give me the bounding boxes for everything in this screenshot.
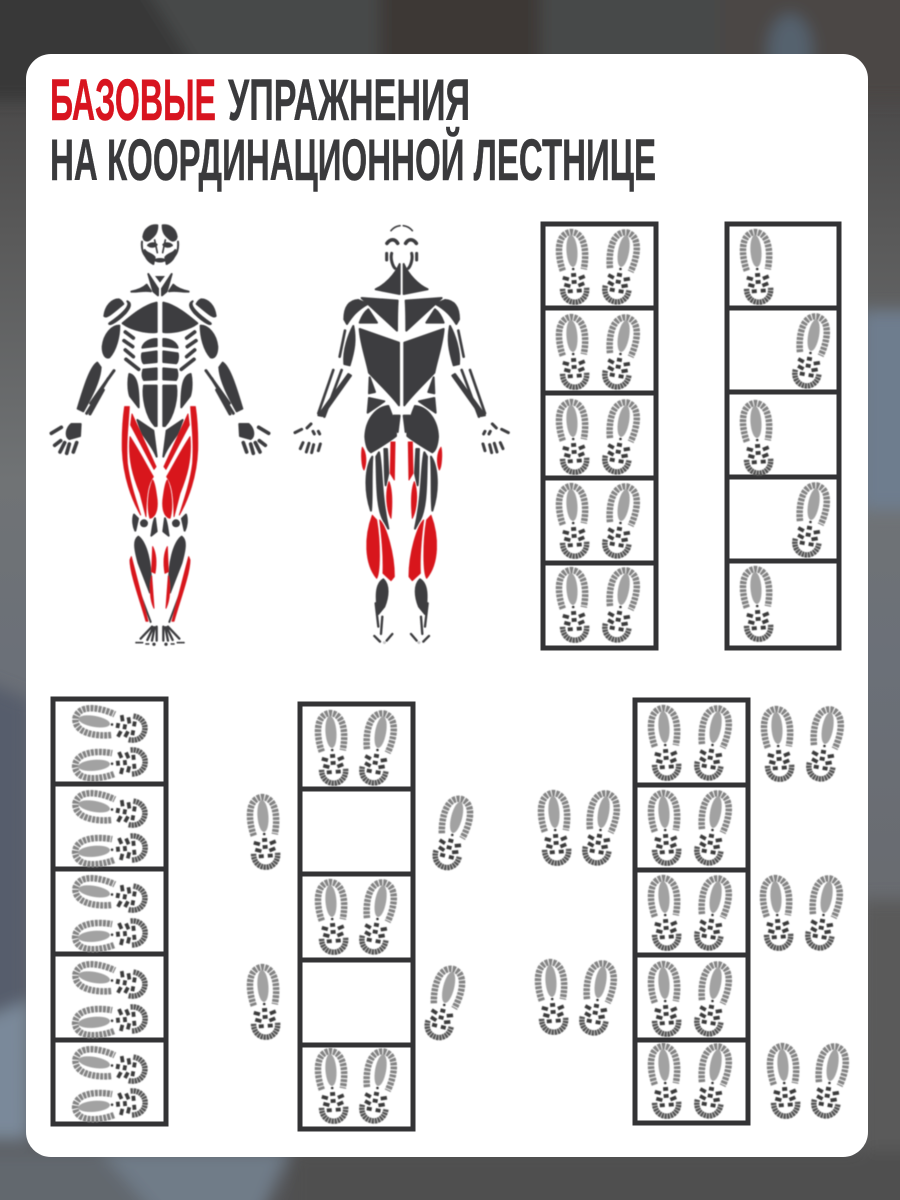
footprints	[742, 231, 830, 640]
title: УПРАЖНЕНИЯ	[228, 68, 470, 133]
ladder: alternating single foot	[727, 224, 839, 648]
ladder frame	[300, 704, 413, 1129]
ladder frame	[727, 224, 839, 648]
ladder frame	[53, 699, 166, 1124]
ladder: lateral in and out steps	[537, 700, 849, 1123]
footprints	[73, 705, 147, 1121]
ladder frame	[543, 224, 656, 648]
ladder: jumping jacks in and out	[249, 704, 474, 1129]
footprints	[249, 711, 474, 1123]
muscle figure: back view	[295, 226, 508, 644]
title	[50, 68, 656, 193]
footprints	[537, 706, 849, 1118]
ladder frame	[635, 700, 748, 1123]
title: БАЗОВЫЕ	[50, 68, 216, 133]
footprints	[558, 230, 640, 642]
ladder: sideways stance	[53, 699, 166, 1124]
muscle figure: front view	[51, 225, 269, 646]
ladder: both feet in every cell	[543, 224, 656, 648]
